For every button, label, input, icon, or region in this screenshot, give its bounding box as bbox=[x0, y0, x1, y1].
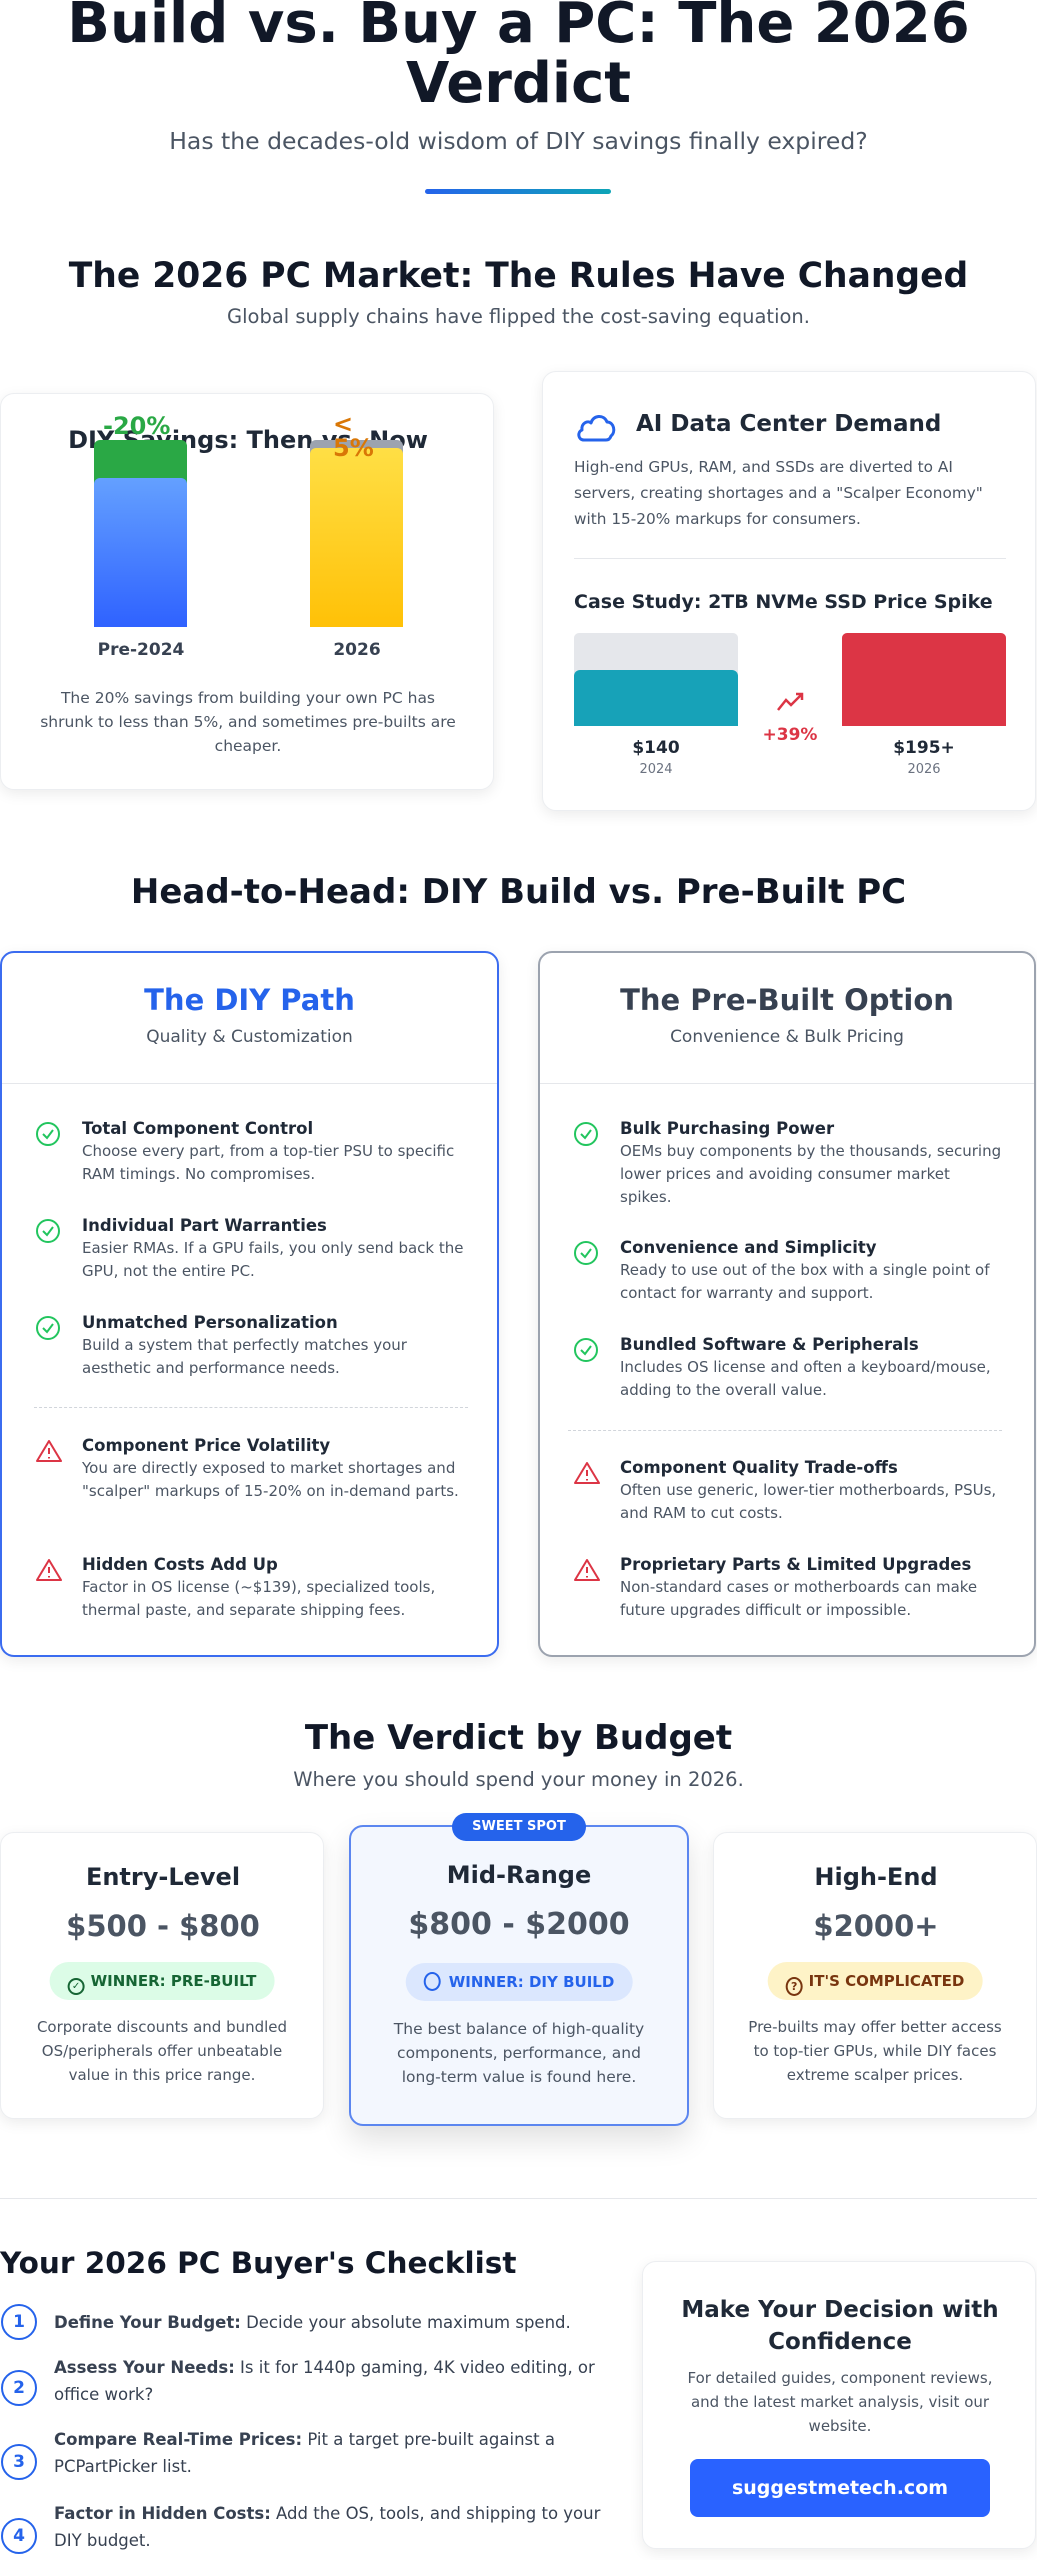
panel: mid-range: Mid-Range bbox=[447, 1861, 591, 1889]
title bbox=[67, 0, 970, 116]
panel: AI data center demand bbox=[542, 371, 1036, 811]
badge: winner DIY: WINNER: DIY BUILD bbox=[449, 1973, 614, 1991]
badge: winner pre-built: ✓ bbox=[72, 1981, 80, 1992]
section subheading: Global supply chains have flipped the cost-saving equation. bbox=[227, 305, 810, 328]
labels bbox=[632, 738, 680, 777]
label <5%: 5% bbox=[333, 434, 374, 462]
panel: pre-built option: Ready to use out of the box with a single point of contact for warranty and support. bbox=[620, 1261, 990, 1302]
label +39%: +39% bbox=[763, 725, 817, 745]
item: hidden costs bbox=[36, 1555, 435, 1619]
badge: complicated: ? bbox=[791, 1980, 797, 1993]
panel: DIY path: Unmatched Personalization bbox=[82, 1313, 338, 1332]
panel: entry-level bbox=[0, 1832, 324, 2119]
panel: pre-built option: Convenience & Bulk Pricing bbox=[670, 1027, 904, 1047]
panel: entry-level: Entry-Level bbox=[86, 1863, 240, 1891]
step 2: 2 bbox=[13, 2378, 25, 2398]
panel: pre-built option: Bulk Purchasing Power bbox=[620, 1119, 834, 1138]
panel: DIY path: Choose every part, from a top-tier PSU to specific RAM timings. No compromises. bbox=[82, 1142, 454, 1183]
icon: trend arrow bbox=[777, 692, 804, 711]
step 4: Factor in Hidden Costs: Add the OS, tools, and shipping to your DIY budget. bbox=[54, 2504, 600, 2550]
labels: 2024 bbox=[639, 762, 673, 777]
checklist heading: Your 2026 PC Buyer's Checklist bbox=[0, 2246, 516, 2280]
step 4: 4 bbox=[13, 2526, 25, 2546]
case study title: Case Study: 2TB NVMe SSD Price Spike bbox=[574, 591, 993, 613]
panel: pre-built option: Convenience and Simplicity bbox=[620, 1238, 877, 1257]
badge: sweet spot bbox=[452, 1813, 586, 1841]
panel: DIY path: Factor in OS license (~$139), specialized tools, thermal paste, and separate shipping fees. bbox=[82, 1578, 435, 1619]
panel: pre-built option: Includes OS license and often a keyboard/mouse, adding to the overall value. bbox=[620, 1358, 991, 1399]
bar: 2026 bbox=[842, 633, 1006, 726]
panel: AI data center demand: $195+ bbox=[893, 738, 955, 758]
panel: DIY path: Easier RMAs. If a GPU fails, you only send back the GPU, not the entire PC. bbox=[82, 1239, 464, 1280]
heading: The Pre-Built Option bbox=[620, 983, 954, 1017]
step 1: Define Your Budget: Decide your absolute maximum spend. bbox=[54, 2313, 571, 2332]
panel: mid-range bbox=[349, 1825, 689, 2126]
panel: pre-built option bbox=[538, 951, 1036, 1657]
panel: high-end: High-End bbox=[814, 1863, 938, 1891]
panel: call to action bbox=[642, 2261, 1036, 2549]
section subheading: Where you should spend your money in 2026. bbox=[293, 1768, 744, 1791]
panel: DIY path: Quality & Customization bbox=[146, 1027, 353, 1047]
panel: call to action: For detailed guides, component reviews, and the latest market analysis, visit our website. bbox=[688, 2369, 992, 2435]
item: proprietary bbox=[574, 1555, 977, 1619]
panel: DIY savings chart bbox=[0, 393, 494, 790]
panel: pre-built option: Often use generic, lower-tier motherboards, PSUs, and RAM to cut costs. bbox=[620, 1481, 996, 1522]
item: bundled bbox=[574, 1335, 991, 1399]
chart title: DIY Savings: Then vs. Now bbox=[68, 426, 428, 454]
bar: pre-2024 bbox=[94, 440, 187, 627]
heading: AI Data Center Demand bbox=[636, 411, 941, 437]
panel: call to action: Make Your Decision with Confidence bbox=[681, 2297, 999, 2355]
step 2: Assess Your Needs: Is it for 1440p gaming, 4K video editing, or office work? bbox=[54, 2358, 595, 2404]
panel: mid-range: $800 - $2000 bbox=[408, 1907, 630, 1942]
section heading: verdict: The Verdict by Budget bbox=[305, 1718, 732, 1758]
panel: DIY path: Build a system that perfectly matches your aesthetic and performance needs. bbox=[82, 1336, 407, 1377]
step 3: Compare Real-Time Prices: Pit a target pre-built against a PCPartPicker list. bbox=[54, 2430, 555, 2476]
badge: sweet spot: SWEET SPOT bbox=[472, 1819, 566, 1834]
accent bar bbox=[425, 189, 611, 194]
step 1 bbox=[1, 2304, 571, 2340]
item: total control bbox=[36, 1119, 454, 1183]
title: Verdict bbox=[406, 51, 631, 116]
axis labels: Pre-2024 bbox=[98, 640, 184, 660]
item: warranties bbox=[36, 1216, 464, 1280]
panel: high-end: $2000+ bbox=[813, 1909, 939, 1943]
badge: complicated: IT'S COMPLICATED bbox=[809, 1972, 964, 1990]
panel: DIY path: Total Component Control bbox=[82, 1119, 313, 1138]
label <5%: < bbox=[333, 410, 353, 438]
panel: pre-built option: Non-standard cases or motherboards can make future upgrades difficult or impossible. bbox=[620, 1578, 977, 1619]
section heading: head-to-head: Head-to-Head: DIY Build vs. Pre-Built PC bbox=[131, 872, 906, 912]
badge: complicated bbox=[768, 1962, 982, 2000]
panel: DIY path: You are directly exposed to market shortages and "scalper" markups of 15-20% on in-demand parts. bbox=[82, 1459, 459, 1500]
panel: DIY path bbox=[0, 951, 499, 1657]
labels: $140 bbox=[632, 738, 680, 758]
icon: cloud bbox=[577, 415, 616, 442]
badge: winner pre-built bbox=[50, 1962, 274, 2000]
panel: pre-built option: OEMs buy components by the thousands, securing lower prices and avoiding consumer market spikes. bbox=[620, 1142, 1001, 1206]
item: personalization bbox=[36, 1313, 407, 1377]
item: convenience bbox=[574, 1238, 990, 1302]
panel: high-end: Pre-builts may offer better access to top-tier GPUs, while DIY faces extreme scalper prices. bbox=[748, 2018, 1002, 2084]
section heading: market: The 2026 PC Market: The Rules Have Changed bbox=[69, 256, 968, 296]
bar: 2026 bbox=[310, 440, 403, 627]
panel: pre-built option: Proprietary Parts & Limited Upgrades bbox=[620, 1555, 971, 1574]
panel: DIY path: Individual Part Warranties bbox=[82, 1216, 327, 1235]
checklist bbox=[1, 2304, 600, 2554]
panel: DIY path: Component Price Volatility bbox=[82, 1436, 330, 1455]
panel: DIY path: Hidden Costs Add Up bbox=[82, 1555, 278, 1574]
body text: High-end GPUs, RAM, and SSDs are diverted to AI servers, creating shortages and a "Scalper Economy" with 15-20% markups for consumers. bbox=[574, 458, 983, 528]
panel: pre-built option: Component Quality Trade-offs bbox=[620, 1458, 898, 1477]
panel: entry-level: Corporate discounts and bundled OS/peripherals offer unbeatable value in this price range. bbox=[37, 2018, 287, 2084]
item: quality tradeoffs bbox=[574, 1458, 996, 1522]
panel: mid-range: The best balance of high-quality components, performance, and long-term value is found here. bbox=[394, 2020, 644, 2086]
label <5% bbox=[333, 410, 374, 462]
panel: entry-level: $500 - $800 bbox=[66, 1909, 260, 1943]
label -20%: -20% bbox=[103, 412, 170, 440]
badge: winner pre-built: WINNER: PRE-BUILT bbox=[91, 1972, 256, 1990]
item: volatility bbox=[36, 1436, 459, 1500]
button bbox=[690, 2459, 990, 2517]
panel: DIY savings chart: 2026 bbox=[333, 640, 381, 660]
step 3: 3 bbox=[13, 2452, 25, 2472]
subtitle: Has the decades-old wisdom of DIY savings finally expired? bbox=[169, 127, 868, 155]
heading: The DIY Path bbox=[144, 983, 355, 1017]
bar: 2024 bbox=[574, 633, 738, 726]
caption: The 20% savings from building your own PC has shrunk to less than 5%, and sometimes pre-builts are cheaper. bbox=[40, 689, 456, 755]
step 1: 1 bbox=[13, 2312, 25, 2332]
panel: high-end bbox=[713, 1832, 1037, 2119]
panel: AI data center demand: 2026 bbox=[907, 762, 941, 777]
panel: pre-built option: Bundled Software & Peripherals bbox=[620, 1335, 919, 1354]
badge: winner DIY bbox=[406, 1963, 632, 2001]
item: bulk bbox=[574, 1119, 1001, 1206]
button: suggestmetech.com bbox=[732, 2477, 948, 2499]
